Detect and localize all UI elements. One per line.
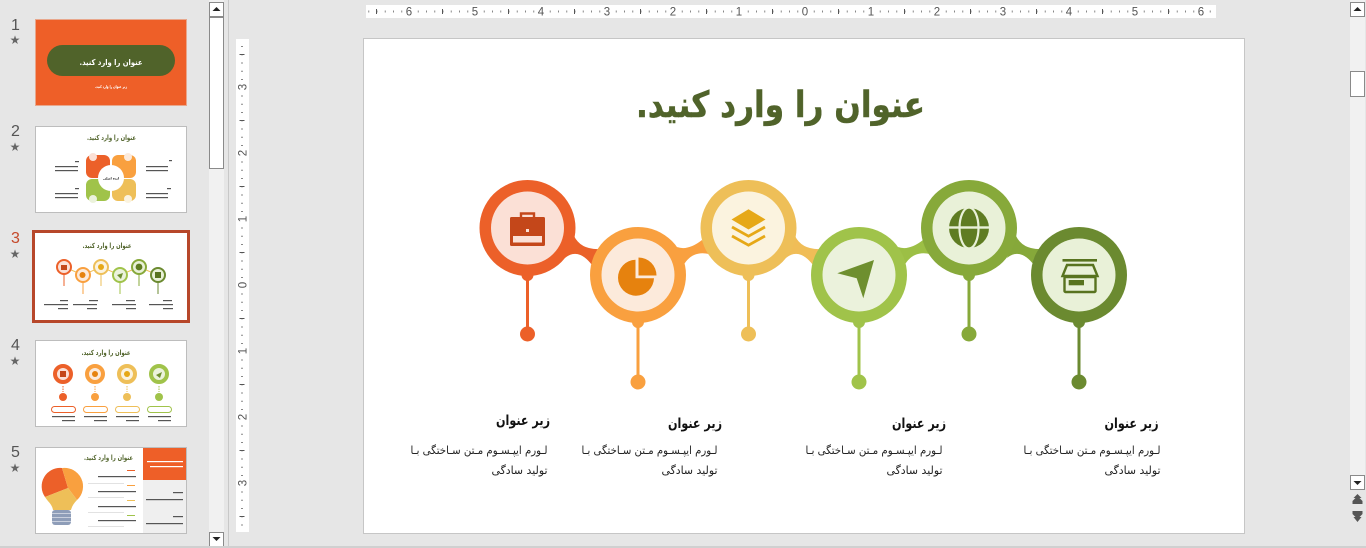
slide number 3: ★ xyxy=(10,247,20,261)
slide number 5: ★ xyxy=(10,461,20,475)
connectors between steps xyxy=(565,236,1042,266)
slide number 1: ★ xyxy=(10,33,20,47)
icon: navigation arrow xyxy=(837,260,874,298)
slide number 1: 1 xyxy=(11,17,20,34)
text block: column 4: زیر عنوان xyxy=(1104,416,1158,432)
slide number 5: 5 xyxy=(11,444,20,461)
horizontal ruler: 6 xyxy=(1198,6,1204,18)
text block: column 2: تولید سادگی xyxy=(662,464,718,477)
thumbnail: slide 3 (selected) xyxy=(34,232,188,322)
horizontal ruler xyxy=(366,5,1216,18)
thumbnail: slide 4: عنوان را وارد کنید. xyxy=(82,349,131,357)
text block: column 2: لـورم ایپـسـوم مـتن سـاختگی بـا xyxy=(582,444,718,457)
slide number 5 xyxy=(10,444,20,475)
vertical ruler: 3 xyxy=(238,480,250,486)
step 6: archive box xyxy=(1031,227,1127,390)
text block: column 4: لـورم ایپـسـوم مـتن سـاختگی بـا xyxy=(1024,444,1160,457)
horizontal ruler: 0 xyxy=(802,6,808,18)
panel: main slide xyxy=(364,38,1244,534)
step 4: navigation arrow xyxy=(811,227,907,390)
slide number 1 xyxy=(10,17,20,47)
thumbnail: slide 2: ایده اصلی xyxy=(103,176,119,180)
text block: column 2: زیر عنوان xyxy=(668,416,722,432)
vertical ruler: 2 xyxy=(238,414,250,420)
horizontal ruler: 2 xyxy=(934,6,940,18)
text block: column 1: تولید سادگی xyxy=(492,464,548,477)
title: عنوان را وارد کنید. xyxy=(636,85,925,126)
horizontal ruler: 4 xyxy=(538,6,545,18)
horizontal ruler: 2 xyxy=(670,6,676,18)
text block: column 4: تولید سادگی xyxy=(1104,464,1160,477)
thumbnail: slide 2 xyxy=(36,126,186,212)
vertical ruler: 0 xyxy=(238,282,250,288)
icon: layers xyxy=(732,209,766,245)
text block: column 1: زیر عنوان xyxy=(496,413,550,429)
horizontal ruler: 3 xyxy=(1000,6,1006,18)
icon: briefcase xyxy=(510,214,545,246)
slide number 4 xyxy=(10,337,20,368)
text block: column 3: لـورم ایپـسـوم مـتن سـاختگی بـا xyxy=(806,444,942,457)
horizontal ruler: 4 xyxy=(1066,6,1073,18)
text block: column 2 xyxy=(582,416,722,477)
panel: thumbnail scrollbar xyxy=(209,0,224,546)
slide number 2: 2 xyxy=(11,123,20,140)
slide number 2: ★ xyxy=(10,140,20,154)
text block: column 3: تولید سادگی xyxy=(886,464,942,477)
thumbnail: slide 1 xyxy=(36,20,186,106)
horizontal ruler: 1 xyxy=(868,6,874,18)
panel: slide thumbnails xyxy=(10,17,188,534)
vertical ruler: 1 xyxy=(238,348,250,354)
vertical ruler: 3 xyxy=(238,84,250,90)
text block: column 3: زیر عنوان xyxy=(892,416,946,432)
icon: archive box xyxy=(1062,259,1098,292)
horizontal ruler: 1 xyxy=(736,6,742,18)
slide number 3: 3 xyxy=(11,230,20,247)
thumbnail: slide 4 xyxy=(36,340,186,426)
text block: column 1: لـورم ایپـسـوم مـتن سـاختگی بـا xyxy=(410,444,548,457)
horizontal ruler: 5 xyxy=(472,6,478,18)
horizontal ruler: 6 xyxy=(406,6,412,18)
panel: right scrollbar xyxy=(1350,0,1365,522)
thumbnail: slide 3 (selected): عنوان را وارد کنید. xyxy=(82,242,132,250)
slide number 3 xyxy=(10,230,20,261)
thumbnail: slide 1: عنوان را وارد کنید. xyxy=(80,58,142,67)
icon: globe xyxy=(948,208,990,248)
step 3: layers xyxy=(700,180,796,342)
thumbnail: slide 1: زیر عنوان را وارد کنید. xyxy=(95,84,127,89)
thumbnail: slide 2: عنوان را وارد کنید. xyxy=(87,134,136,142)
slide number 4: ★ xyxy=(10,354,20,368)
vertical ruler xyxy=(236,39,250,532)
horizontal ruler: 5 xyxy=(1132,6,1138,18)
vertical ruler: 1 xyxy=(238,216,250,222)
slide number 4: 4 xyxy=(11,337,20,354)
step 1: briefcase xyxy=(480,180,576,342)
icon: pie chart xyxy=(618,258,656,296)
thumbnail: slide 5: عنوان را وارد کنید. xyxy=(84,454,133,462)
step 2: pie chart xyxy=(590,227,686,390)
text block: column 4 xyxy=(1024,416,1160,477)
text block: column 3 xyxy=(806,416,946,477)
step 5: globe xyxy=(921,180,1017,342)
vertical ruler: 2 xyxy=(238,150,250,156)
horizontal ruler: 3 xyxy=(604,6,610,18)
thumbnail: slide 5 xyxy=(36,448,186,534)
text block: column 1 xyxy=(410,413,550,477)
slide number 2 xyxy=(10,123,20,154)
